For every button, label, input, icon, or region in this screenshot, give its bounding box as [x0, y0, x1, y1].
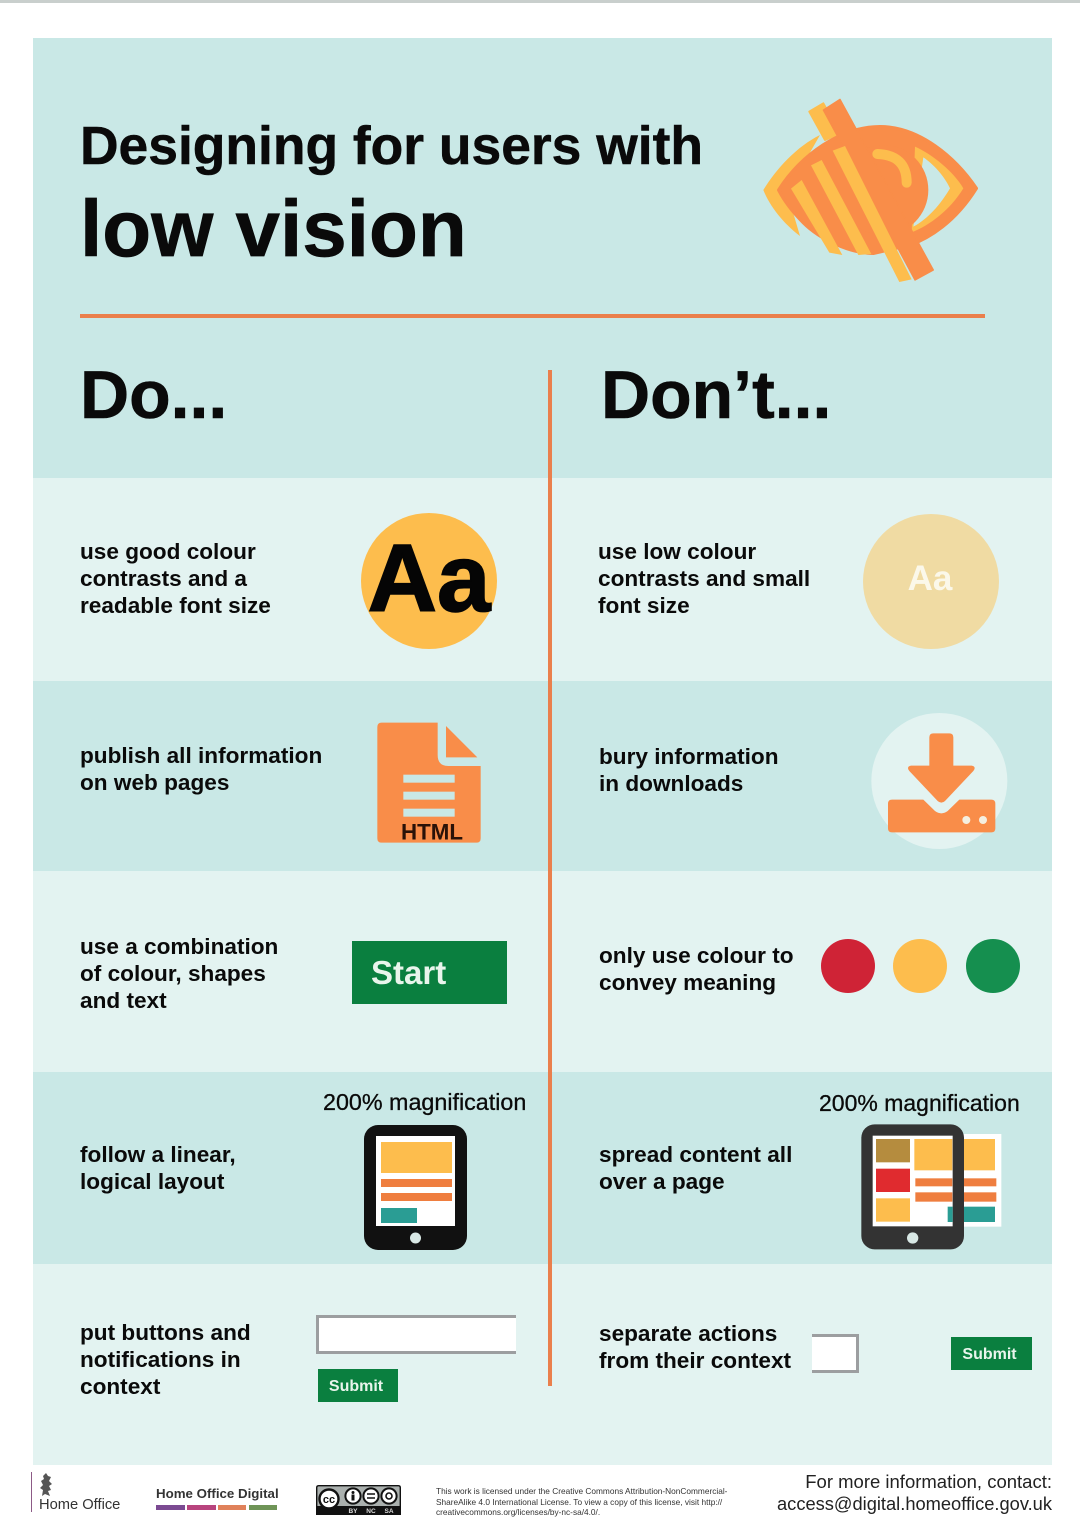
button: Start — [352, 941, 507, 1004]
panel: row 2 — [33, 681, 1052, 871]
text: downloads — [599, 744, 778, 796]
text: downloads: bury information — [599, 744, 778, 769]
text: buttons in context: put buttons and — [80, 1320, 251, 1345]
icon: crossed-out eye — [763, 98, 978, 282]
panel: row 4 — [33, 1072, 1052, 1264]
text: spread content: over a page — [599, 1169, 725, 1194]
icon: tablet linear layout — [364, 1125, 467, 1250]
text: linear layout: logical layout — [80, 1169, 224, 1194]
icon: yellow dot — [893, 939, 947, 993]
divider: vertical rule — [548, 370, 552, 1386]
label: magnification left: 200% magnification — [323, 1089, 526, 1115]
text: buttons in context: context — [80, 1374, 160, 1399]
logo: Creative Commons: NC — [366, 1508, 376, 1515]
text: web pages: on web pages — [80, 770, 229, 795]
logo: Home Office Digital — [156, 1486, 279, 1510]
text: separate actions: separate actions — [599, 1321, 777, 1346]
heading: Do: Do... — [80, 357, 227, 433]
text: spread content — [599, 1142, 792, 1194]
button: Submit separated — [951, 1337, 1032, 1370]
form field: in context — [316, 1315, 516, 1354]
logo: Creative Commons: cc — [323, 1494, 335, 1506]
label: magnification right: 200% magnification — [819, 1090, 1020, 1116]
text: separate actions: from their context — [599, 1348, 791, 1373]
text: good contrast — [80, 539, 271, 618]
text: colour only: only use colour to — [599, 943, 794, 968]
text: linear layout: follow a linear, — [80, 1142, 236, 1167]
panel: row 3 — [33, 871, 1052, 1072]
text: combination — [80, 934, 278, 1013]
text: buttons in context — [80, 1320, 251, 1399]
title: low vision — [80, 184, 467, 273]
text: licence: creativecommons.org/licenses/by-nc-sa/4.0/. — [436, 1507, 600, 1517]
logo: Home Office — [31, 1472, 120, 1513]
text: good contrast: contrasts and a — [80, 566, 247, 591]
icon: HTML document — [377, 722, 481, 844]
text: web pages: publish all information — [80, 743, 322, 768]
logo: Creative Commons: SA — [384, 1508, 394, 1515]
text: separate actions — [599, 1321, 791, 1373]
text: low contrast: font size — [598, 593, 690, 618]
icon: low contrast Aa — [863, 514, 999, 649]
button: Submit in context: Submit — [329, 1378, 383, 1395]
button: Submit in context — [318, 1369, 398, 1402]
title: Designing for users with — [80, 117, 703, 176]
text: licence: ShareAlike 4.0 International License. To view a copy of this license, visit http:// — [436, 1496, 722, 1506]
text: contact — [777, 1471, 1052, 1514]
text: web pages — [80, 743, 322, 795]
text: good contrast: use good colour — [80, 539, 256, 564]
text: licence — [436, 1486, 727, 1517]
panel: row 5 — [33, 1264, 1052, 1465]
icon: red dot — [821, 939, 875, 993]
text: licence: This work is licensed under the Creative Commons Attribution-NonCommercial- — [436, 1486, 727, 1496]
form field: separated — [812, 1334, 859, 1373]
text: combination: use a combination — [80, 934, 278, 959]
button: Start: Start — [371, 954, 446, 991]
panel: row 1 — [33, 478, 1052, 681]
logo: Creative Commons — [316, 1485, 401, 1515]
text: low contrast: contrasts and small — [598, 566, 810, 591]
text: contact: For more information, contact: — [805, 1471, 1052, 1492]
logo: Home Office Digital: Home Office Digital — [156, 1486, 279, 1501]
text: combination: of colour, shapes — [80, 961, 266, 986]
text: spread content: spread content all — [599, 1142, 792, 1167]
button: Submit separated: Submit — [962, 1346, 1017, 1363]
text: linear layout — [80, 1142, 236, 1194]
logo: Home Office: Home Office — [39, 1497, 120, 1513]
icon: HTML document: HTML — [401, 819, 463, 844]
icon: download — [872, 713, 1008, 849]
text: colour only: convey meaning — [599, 970, 776, 995]
logo: Creative Commons: BY — [348, 1508, 358, 1515]
icon: tablet spread layout — [861, 1124, 1002, 1250]
icon: low contrast Aa: Aa — [908, 559, 952, 598]
text: downloads: in downloads — [599, 771, 743, 796]
divider: horizontal rule — [80, 314, 985, 318]
text: buttons in context: notifications in — [80, 1347, 241, 1372]
icon: high contrast Aa: Aa — [368, 525, 490, 632]
text: contact: access@digital.homeoffice.gov.uk — [777, 1493, 1052, 1514]
title — [80, 117, 703, 273]
heading: Don't: Don’t... — [601, 357, 831, 433]
text: good contrast: readable font size — [80, 593, 271, 618]
text: low contrast — [598, 539, 810, 618]
text: colour only — [599, 943, 794, 995]
text: combination: and text — [80, 988, 167, 1013]
icon: green dot — [966, 939, 1020, 993]
panel: header — [33, 38, 1052, 478]
text: low contrast: use low colour — [598, 539, 756, 564]
